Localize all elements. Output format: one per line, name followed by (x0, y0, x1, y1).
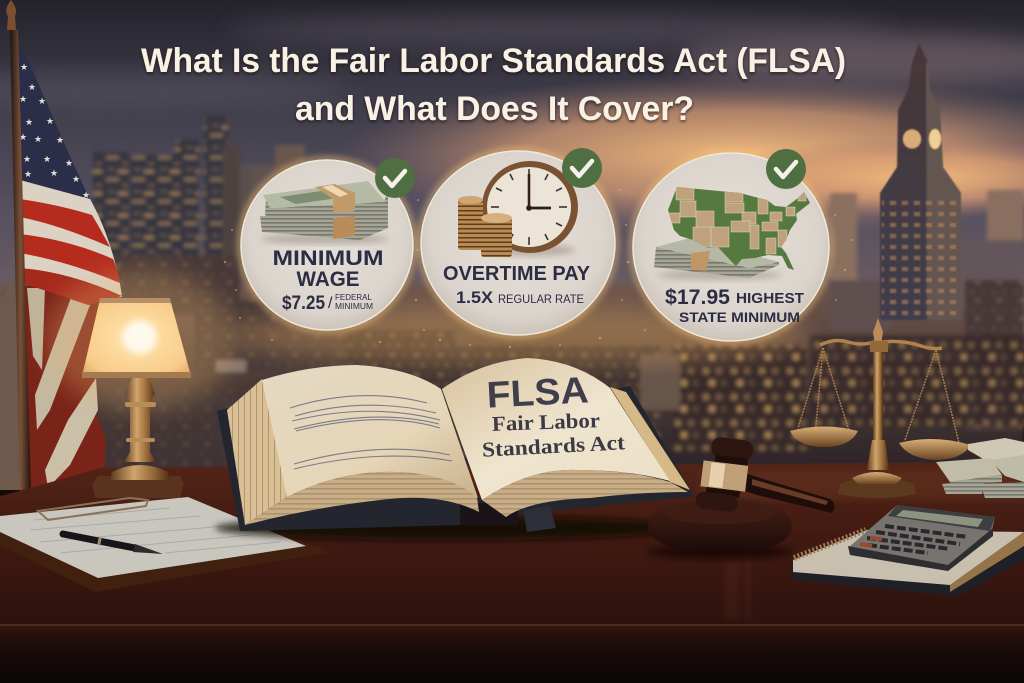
value: 1.5X regular rate: REGULAR RATE (498, 292, 584, 306)
gavel head (695, 435, 754, 514)
title: What Is the Fair Labor Standards Act (FLSA) (141, 42, 846, 80)
gavel handle (745, 473, 835, 513)
flag stars: ★ (23, 154, 31, 164)
panel: highest state minimum (633, 149, 829, 341)
value: $17.95 highest state minimum (665, 286, 804, 325)
heading: Minimum Wage: WAGE (296, 268, 360, 291)
book right page (442, 358, 670, 500)
icon: stacked cash (260, 181, 389, 244)
value: $7.25 federal minimum: FEDERAL (335, 293, 373, 302)
title (141, 42, 846, 128)
icon: wall clock (482, 161, 578, 256)
heading: Minimum Wage: MINIMUM (272, 247, 384, 270)
book subtitle: Standards Act (481, 430, 625, 462)
icon: coin stacks (458, 196, 512, 257)
flag stars: ★ (28, 82, 36, 92)
title: and What Does It Cover? (295, 90, 694, 128)
panel: minimum wage (241, 158, 415, 330)
icon: check mark (562, 148, 602, 188)
icon: cash under map (654, 238, 782, 280)
book left page (262, 365, 478, 498)
value: $17.95 highest state minimum: HIGHEST (736, 290, 804, 307)
flag stars: ★ (82, 190, 90, 200)
value: $7.25 federal minimum: $7.25 (282, 293, 325, 314)
flag stars: ★ (19, 132, 27, 142)
flag stars: ★ (46, 116, 54, 126)
flag stars: ★ (56, 135, 64, 145)
open book (215, 358, 694, 540)
background: blurred city skyline (0, 115, 1024, 480)
American flag (0, 38, 122, 490)
panel: overtime pay (421, 148, 615, 335)
flag stars: ★ (34, 134, 42, 144)
flag stars (19, 62, 90, 200)
value: $17.95 highest state minimum: STATE MINIMUM (679, 309, 800, 325)
flag stars: ★ (25, 117, 33, 127)
value: 1.5X regular rate: 1.5X (456, 288, 494, 307)
desk (0, 462, 1024, 683)
golden sparkles (224, 189, 853, 348)
flag stars: ★ (50, 168, 58, 178)
flag stars: ★ (19, 94, 27, 104)
glow around feature circles (240, 150, 830, 342)
heading: Minimum Wage (272, 247, 384, 291)
heading: Overtime Pay: OVERTIME PAY (443, 263, 591, 285)
book title: FLSA: FLSA (486, 369, 590, 416)
value: $7.25 federal minimum: / (328, 295, 333, 312)
table lamp (45, 270, 235, 498)
clipboard with paper (0, 497, 330, 592)
flag stars: ★ (24, 169, 32, 179)
value: $17.95 highest state minimum: $17.95 (665, 286, 730, 309)
flag stars: ★ (65, 158, 73, 168)
icon: map of United States (668, 187, 810, 270)
calculator (848, 505, 995, 571)
background: dusk sky (0, 0, 1024, 340)
flag stars: ★ (43, 154, 51, 164)
scales of justice (790, 318, 971, 498)
flag stars: ★ (38, 96, 46, 106)
pen (63, 534, 163, 554)
bookmark (523, 506, 556, 532)
notebook with calculator (793, 505, 1024, 596)
value: 1.5X regular rate (456, 288, 584, 307)
gavel (648, 435, 835, 559)
book subtitle (481, 408, 625, 462)
flag stars: ★ (72, 174, 80, 184)
value: $7.25 federal minimum (282, 293, 373, 314)
value: $7.25 federal minimum: MINIMUM (335, 302, 373, 311)
clock tower (880, 43, 961, 320)
cash stacks on desk (936, 438, 1024, 498)
book subtitle: Fair Labor (492, 408, 600, 436)
icon: check mark (766, 149, 806, 189)
flag pole (6, 0, 31, 492)
icon: check mark (375, 158, 415, 198)
flag stars: ★ (20, 62, 28, 72)
